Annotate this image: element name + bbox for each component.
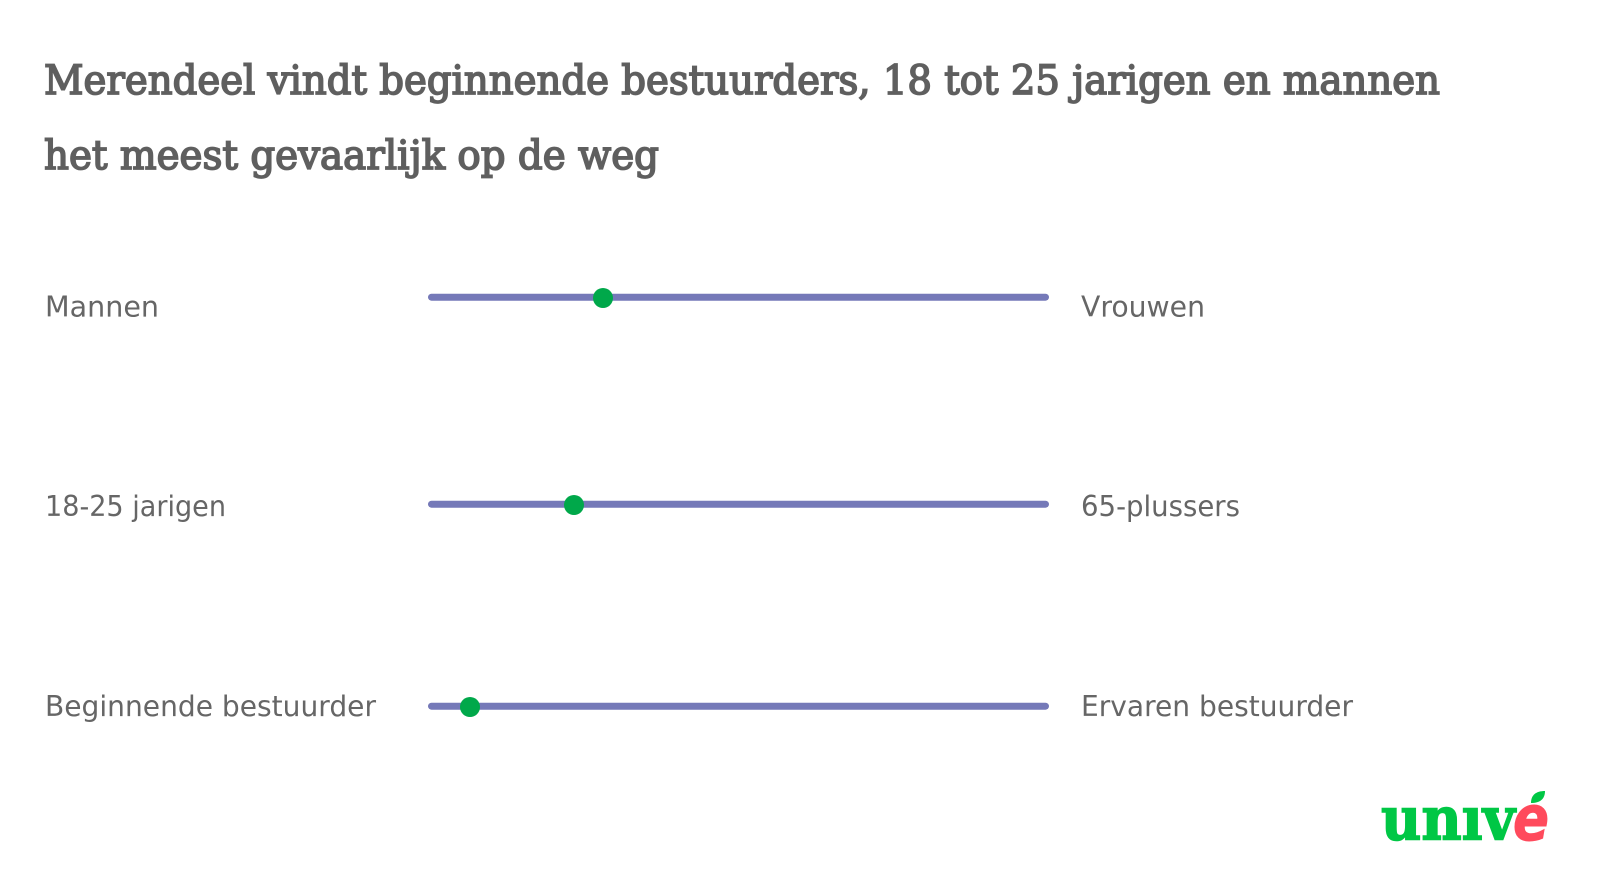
row: 18-25 jarigen vs 65-plussers [45, 490, 1240, 523]
row: Beginnende vs Ervaren bestuurder [45, 690, 1353, 723]
title [44, 56, 1440, 179]
logo: Univé: e [1513, 782, 1549, 855]
logo: Univé: unıv [1381, 784, 1517, 854]
label: 65-plussers: 65-plussers [1081, 490, 1240, 523]
title: Merendeel vindt beginnende bestuurders, 18 tot 25 jarigen en mannen [44, 56, 1440, 104]
label: Beginnende bestuurder: Beginnende bestuurder [45, 690, 376, 723]
scale slider: 18-25 jarigen vs 65-plussers [428, 495, 1049, 515]
label: 18-25 jarigen: 18-25 jarigen [45, 490, 226, 523]
label: Mannen: Mannen [45, 290, 159, 324]
scale slider: Beginnende vs Ervaren bestuurder [428, 697, 1049, 717]
icon: leaf [1531, 791, 1545, 803]
label: Vrouwen: Vrouwen [1081, 290, 1205, 324]
row: Mannen vs Vrouwen [45, 288, 1205, 324]
title: het meest gevaarlijk op de weg [44, 131, 659, 179]
label: Ervaren bestuurder: Ervaren bestuurder [1081, 690, 1353, 723]
scale slider: Mannen vs Vrouwen [428, 288, 1049, 308]
